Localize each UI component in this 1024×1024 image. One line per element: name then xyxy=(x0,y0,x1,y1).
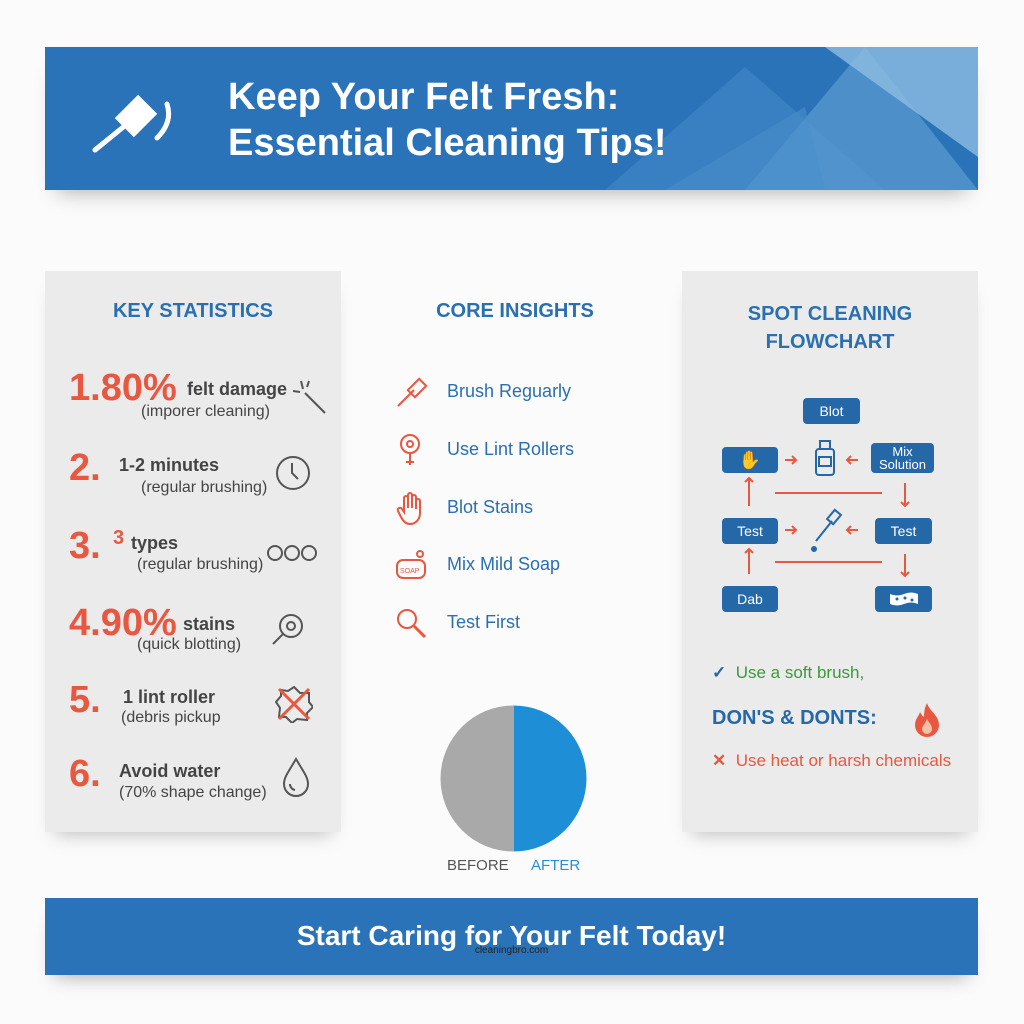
flowchart diagram: Mix xyxy=(892,444,913,459)
insight list xyxy=(396,377,574,638)
do item: ✓ Use a soft brush, xyxy=(712,663,864,682)
title xyxy=(228,76,667,164)
heading: dos and donts: DON'S & DONTS: xyxy=(712,707,877,729)
stat 2: 1-2 minutes xyxy=(119,455,219,475)
stat 6: Avoid water xyxy=(119,761,220,781)
stat 6: 6. xyxy=(69,753,101,795)
bottle xyxy=(816,441,834,475)
heading: key statistics: KEY STATISTICS xyxy=(113,300,273,322)
insight list: Brush Reguarly xyxy=(447,381,571,401)
stat 1: 1.80% xyxy=(69,367,177,409)
insight list: Use Lint Rollers xyxy=(447,439,574,459)
stat 4 xyxy=(69,602,303,653)
heading: core insights: CORE INSIGHTS xyxy=(436,300,594,322)
flowchart diagram: Blot xyxy=(819,403,844,419)
stat 3: 3. xyxy=(69,525,101,567)
stat 3: 3 xyxy=(113,527,124,549)
stat 1 xyxy=(69,367,326,420)
footer text: Start Caring for Your Felt Today! xyxy=(297,920,726,951)
stat 1: (imporer cleaning) xyxy=(141,403,270,420)
panel: key statistics xyxy=(45,271,341,832)
stat 5: (debris pickup xyxy=(121,709,221,726)
before/after circle xyxy=(440,706,586,852)
dropper xyxy=(812,510,841,551)
stat 4: 4.90% xyxy=(69,602,177,644)
title: Essential Cleaning Tips! xyxy=(228,122,667,164)
header banner xyxy=(45,47,978,190)
stat 5: 1 lint roller xyxy=(123,687,215,707)
dont item: ✕ Use heat or harsh chemicals xyxy=(712,751,951,770)
stat 3 xyxy=(69,525,317,573)
flowchart diagram xyxy=(722,398,934,612)
heading: flowchart: SPOT CLEANING xyxy=(748,303,912,325)
heading: flowchart: FLOWCHART xyxy=(766,331,894,353)
stat 4: (quick blotting) xyxy=(137,636,241,653)
insight list: Test First xyxy=(447,612,520,632)
stat 4: stains xyxy=(183,614,235,634)
stat 2: 2. xyxy=(69,447,101,489)
watermark: cleaningbro.com xyxy=(475,945,548,956)
heading: flowchart xyxy=(748,303,912,353)
stat 3: (regular brushing) xyxy=(137,556,263,573)
title: Keep Your Felt Fresh: xyxy=(228,76,619,118)
insight list: Mix Mild Soap xyxy=(447,554,560,574)
panel: spot cleaning flowchart xyxy=(682,271,978,832)
footer banner xyxy=(45,898,978,975)
stat 1: felt damage xyxy=(187,379,287,399)
insight list: Blot Stains xyxy=(447,497,533,517)
icon: flame xyxy=(915,703,939,737)
stat 2: (regular brushing) xyxy=(141,479,267,496)
label: after: AFTER xyxy=(531,857,580,874)
flowchart diagram: ✋ xyxy=(739,450,761,470)
stat 6: (70% shape change) xyxy=(119,784,267,801)
label: before: BEFORE xyxy=(447,857,509,874)
stat 6 xyxy=(69,753,309,801)
flowchart diagram: Dab xyxy=(737,591,763,607)
flowchart diagram: Solution xyxy=(879,457,926,472)
stat 3: types xyxy=(131,533,178,553)
stat 5 xyxy=(69,679,313,726)
flowchart diagram: Test xyxy=(737,523,763,539)
insight list: SOAP xyxy=(400,568,420,575)
stat 2 xyxy=(69,447,310,496)
flowchart diagram: Test xyxy=(891,523,916,539)
stat 5: 5. xyxy=(69,679,101,721)
panel: core insights xyxy=(396,300,594,638)
icon: brush xyxy=(92,94,172,152)
